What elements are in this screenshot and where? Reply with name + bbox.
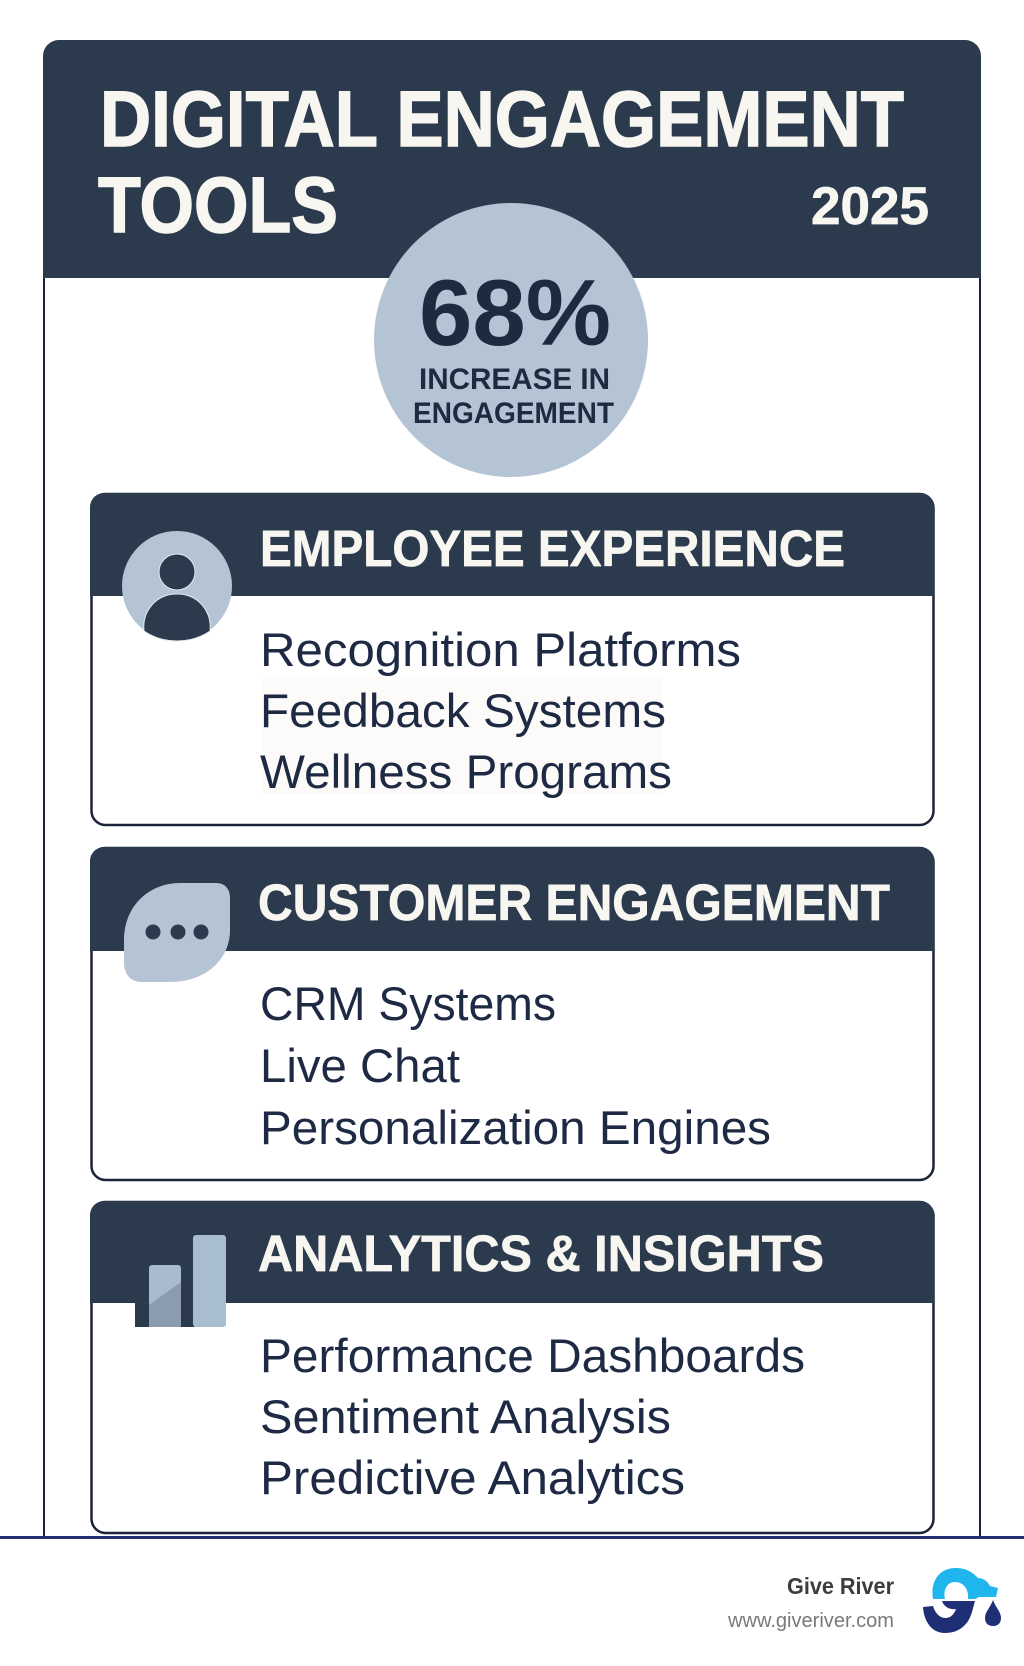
list: Feedback Systems [260,684,666,737]
list: Wellness Programs [260,745,672,798]
stat label: INCREASE IN [419,363,610,396]
icon: give river logo [923,1568,1001,1633]
title [98,74,904,249]
year: 2025 [811,177,929,236]
list: Recognition Platforms [260,623,741,676]
list: CRM Systems [260,977,556,1030]
list [260,977,771,1154]
list: Sentiment Analysis [260,1390,671,1443]
heading: EMPLOYEE EXPERIENCE [260,520,845,577]
stat label: ENGAGEMENT [413,397,614,430]
icon: chat bubble [124,883,230,982]
panel: employee experience [90,493,934,825]
title: TOOLS [98,160,338,249]
footer brand [727,1568,1001,1633]
stat label [413,363,614,430]
list: Performance Dashboards [260,1329,805,1382]
list [260,1329,805,1504]
list: Personalization Engines [260,1101,771,1154]
stat value: 68% [419,260,611,365]
heading: CUSTOMER ENGAGEMENT [258,874,890,931]
list [260,623,741,798]
title: DIGITAL ENGAGEMENT [100,74,904,163]
brand url: www.giveriver.com [727,1610,894,1632]
icon: person [122,531,232,641]
outer frame [44,270,980,1537]
title banner [43,40,981,278]
panel: customer engagement [90,847,934,1180]
heading: ANALYTICS & INSIGHTS [258,1225,824,1282]
icon: bar chart [135,1235,226,1327]
list: Predictive Analytics [260,1451,685,1504]
brand name: Give River [787,1573,894,1599]
stat circle [374,203,648,477]
panel: analytics and insights [90,1201,934,1533]
footer rule [0,1536,1024,1539]
list: Live Chat [260,1039,460,1092]
